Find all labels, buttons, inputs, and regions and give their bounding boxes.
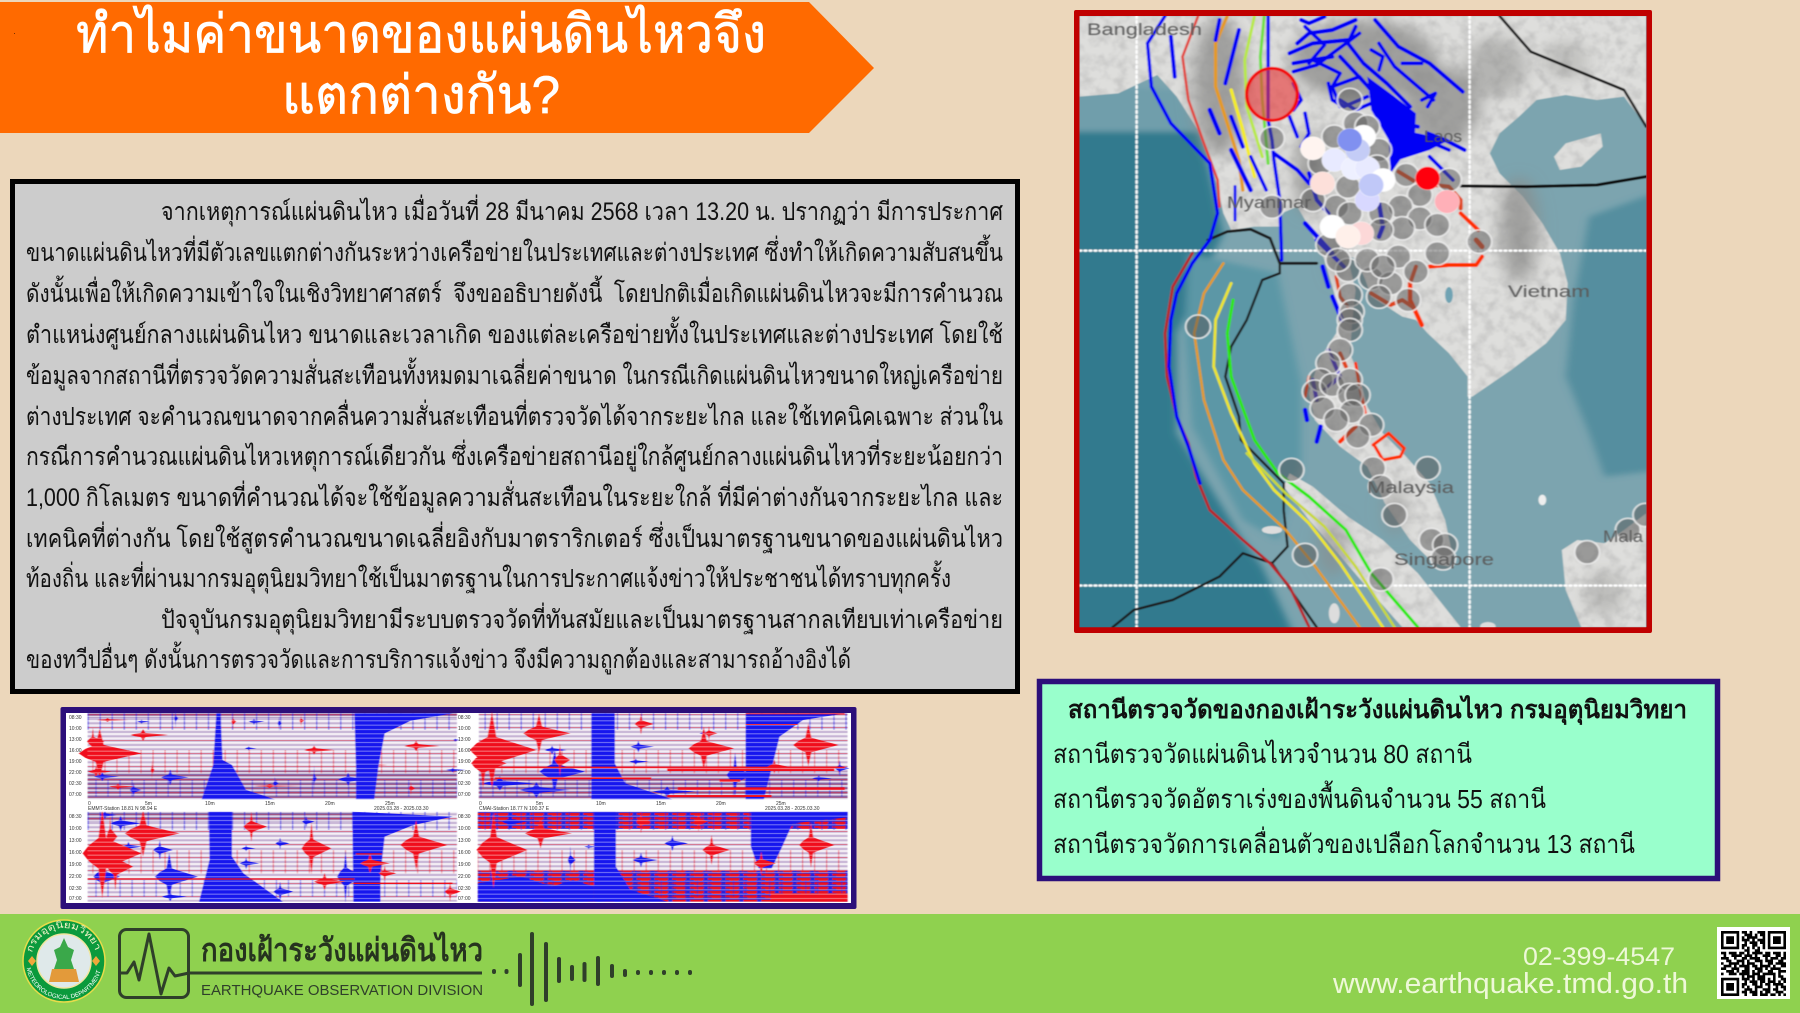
seismogram axis labels: 02:30 (458, 781, 471, 787)
seismogram axis labels: 10m (205, 801, 215, 807)
panel: station counts: สถานีตรวจวัดการเคลื่อนตัวของเปลือกโลกจำนวน 13 สถานี (1053, 826, 1635, 859)
seismogram axis labels: 10:00 (458, 726, 471, 732)
seismogram axis labels: 2025.03.28 - 2025.03.30 (374, 806, 429, 812)
icon: sound wave (494, 934, 690, 1004)
seismogram axis labels: 20m (325, 801, 335, 807)
seismogram axis labels: 19:00 (458, 862, 471, 868)
icon: department logo: METEOROLOGICAL DEPARTMENT (26, 968, 100, 999)
panel: seismograms (60, 707, 856, 909)
footer bar (0, 914, 1800, 1013)
panel: explanation text: ตำแหน่งศูนย์กลางแผ่นดินไหว ขนาดและเวลาเกิด ของแต่ละเครือข่ายทั้งในประเทศและต่างประเทศ โดยใช้ (26, 316, 1003, 350)
seismogram: top right (470, 712, 849, 799)
seismogram axis labels: 07:00 (458, 792, 471, 798)
panel: station counts: สถานีตรวจวัดอัตราเร่งของพื้นดินจำนวน 55 สถานี (1053, 780, 1546, 814)
panel: seismic station map: Singapore (1394, 550, 1494, 569)
seismogram axis labels: 02:30 (69, 781, 82, 787)
seismogram axis labels: 10:00 (458, 826, 471, 832)
panel: seismic station map (1074, 10, 1652, 633)
seismogram axis labels: 5m (145, 801, 152, 807)
seismogram axis labels: 08:30 (69, 715, 82, 721)
icon: department logo: กรมอุตุนิยมวิทยา (28, 920, 100, 952)
seismogram axis labels: 10:00 (69, 726, 82, 732)
panel: seismic station map: Malaysia (1367, 478, 1455, 497)
seismogram: bottom left (83, 808, 461, 903)
logo: earthquake observation division: กองเฝ้าระวังแผ่นดินไหว (201, 931, 483, 968)
seismogram axis labels: 0 (88, 801, 91, 807)
seismogram axis labels: 07:00 (458, 896, 471, 902)
panel: station counts: สถานีตรวจวัดของกองเฝ้าระวังแผ่นดินไหว กรมอุตุนิยมวิทยา (1068, 694, 1687, 726)
seismogram axis labels: 25m (776, 801, 786, 807)
seismogram axis labels: 22:00 (69, 770, 82, 776)
title banner (0, 2, 874, 133)
seismogram axis labels (69, 715, 820, 902)
seismogram axis labels: 22:00 (458, 874, 471, 880)
seismogram axis labels: 5m (536, 801, 543, 807)
seismogram axis labels: 20m (716, 801, 726, 807)
logo: earthquake observation division (119, 930, 483, 999)
seismogram axis labels: 08:30 (458, 814, 471, 820)
seismogram axis labels: 16:00 (69, 748, 82, 754)
panel: explanation text: 1,000 กิโลเมตร ขนาดที่คำนวณได้จะใช้ข้อมูลความสั่นสะเทือนในระยะใกล้ ที่มีค่าต่างกันจากระยะไกล และ (26, 480, 1003, 513)
seismogram axis labels: 0 (479, 801, 482, 807)
seismogram axis labels: 15m (656, 801, 666, 807)
title banner: แตกต่างกัน? (282, 66, 560, 125)
panel: explanation text: ปัจจุบันกรมอุตุนิยมวิทยามีระบบตรวจวัดที่ทันสมัยและเป็นมาตรฐานสากลเทียบเท่าเครือข่าย (161, 602, 1003, 635)
seismogram axis labels: 13:00 (69, 737, 82, 743)
seismogram axis labels: 15m (265, 801, 275, 807)
panel: explanation text: ข้อมูลจากสถานีที่ตรวจวัดความสั่นสะเทือนทั้งหมดมาเฉลี่ยค่าขนาด ในกรณีเกิดแผ่นดินไหวขนาดใหญ่เครือข่าย (26, 357, 1003, 391)
seismogram axis labels: 16:00 (458, 748, 471, 754)
seismogram axis labels: 16:00 (458, 850, 471, 856)
panel: seismic station map: Laos (1424, 127, 1462, 146)
seismogram axis labels: 13:00 (458, 838, 471, 844)
seismogram axis labels: 07:00 (69, 896, 82, 902)
panel: seismic station map: Mala (1603, 527, 1644, 546)
panel: explanation text: กรณีการคำนวณแผ่นดินไหวเหตุการณ์เดียวกัน ซึ่งเครือข่ายสถานีอยู่ใกล้ศูนย์กลางแผ่นดินไหวที่ระยะน้อยกว่า (26, 439, 1003, 472)
logo: earthquake observation division: EARTHQUAKE OBSERVATION DIVISION (201, 982, 483, 999)
seismogram axis labels: 19:00 (69, 862, 82, 868)
seismogram axis labels: 02:30 (458, 886, 471, 892)
seismogram axis labels: 13:00 (458, 737, 471, 743)
seismogram axis labels: 08:30 (458, 715, 471, 721)
contact details: 02-399-4547 (1523, 943, 1675, 971)
seismogram axis labels: 13:00 (69, 838, 82, 844)
contact details: www.earthquake.tmd.go.th (1332, 968, 1688, 1000)
panel: explanation text: ขนาดแผ่นดินไหวที่มีตัวเลขแตกต่างกันระหว่างเครือข่ายในประเทศและต่างประเทศ ซึ่งทำให้เกิดความสับสนขึ้น (26, 234, 1003, 267)
icon: department logo (22, 919, 106, 1003)
panel: seismic station map: Vietnam (1508, 282, 1590, 301)
seismogram axis labels: 16:00 (69, 850, 82, 856)
panel: explanation text: ของทวีปอื่นๆ ดังนั้นการตรวจวัดและการบริการแจ้งข่าว จึงมีความถูกต้องและสามารถอ้างอิงได้ (26, 641, 851, 675)
seismogram: top left (79, 708, 466, 799)
seismogram axis labels: EMMT-Station 18.81 N 98.94 E (88, 806, 158, 812)
panel: seismic station map: Bangladesh (1087, 20, 1202, 39)
seismogram axis labels: CMAI-Station 18.77 N 100.37 E (479, 806, 550, 812)
seismogram axis labels: 02:30 (69, 886, 82, 892)
seismogram axis labels: 25m (385, 801, 395, 807)
seismogram: bottom right (477, 810, 848, 902)
panel: explanation text: จากเหตุการณ์แผ่นดินไหว เมื่อวันที่ 28 มีนาคม 2568 เวลา 13.20 น. ปรากฏว่า มีการประกาศ (161, 194, 1003, 227)
contact details (1332, 943, 1688, 1000)
panel: explanation text (12, 182, 1018, 692)
seismogram axis labels: 10m (596, 801, 606, 807)
seismogram axis labels: 2025.03.28 - 2025.03.30 (765, 806, 820, 812)
panel: explanation text: เทคนิคที่ต่างกัน โดยใช้สูตรคำนวณขนาดเฉลี่ยอิงกับมาตราริกเตอร์ ซึ่งเป็นมาตรฐานขนาดของแผ่นดินไหว (26, 521, 1003, 554)
panel: station counts (1040, 682, 1718, 878)
seismogram axis labels: 10:00 (69, 826, 82, 832)
seismogram axis labels: 19:00 (69, 759, 82, 765)
title banner: ทำไมค่าขนาดของแผ่นดินไหวจึง (76, 4, 766, 64)
seismogram axis labels: 22:00 (458, 770, 471, 776)
seismogram axis labels: 08:30 (69, 814, 82, 820)
panel: explanation text: ดังนั้นเพื่อให้เกิดความเข้าใจในเชิงวิทยาศาสตร์ จึงขออธิบายดังนี้ โดยปกติเมื่อเกิดแผ่นดินไหวจะมีการคำนวณ (26, 275, 1003, 308)
panel: explanation text: ท้องถิ่น และที่ผ่านมากรมอุตุนิยมวิทยาใช้เป็นมาตรฐานในการประกาศแจ้งข่าวให้ประชาชนได้ทราบทุกครั้ง (26, 560, 951, 594)
seismogram axis labels: 07:00 (69, 792, 82, 798)
icon: QR code (1717, 927, 1790, 999)
seismogram axis labels: 22:00 (69, 874, 82, 880)
panel: station counts: สถานีตรวจวัดแผ่นดินไหวจำนวน 80 สถานี (1053, 739, 1472, 769)
seismogram axis labels: 19:00 (458, 759, 471, 765)
panel: seismic station map: Myanmar (1227, 193, 1311, 212)
panel: explanation text: ต่างประเทศ จะคำนวณขนาดจากคลื่นความสั่นสะเทือนที่ตรวจวัดได้จากระยะไกล และใช้เทคนิคเฉพาะ ส่วนใน (26, 399, 1003, 431)
